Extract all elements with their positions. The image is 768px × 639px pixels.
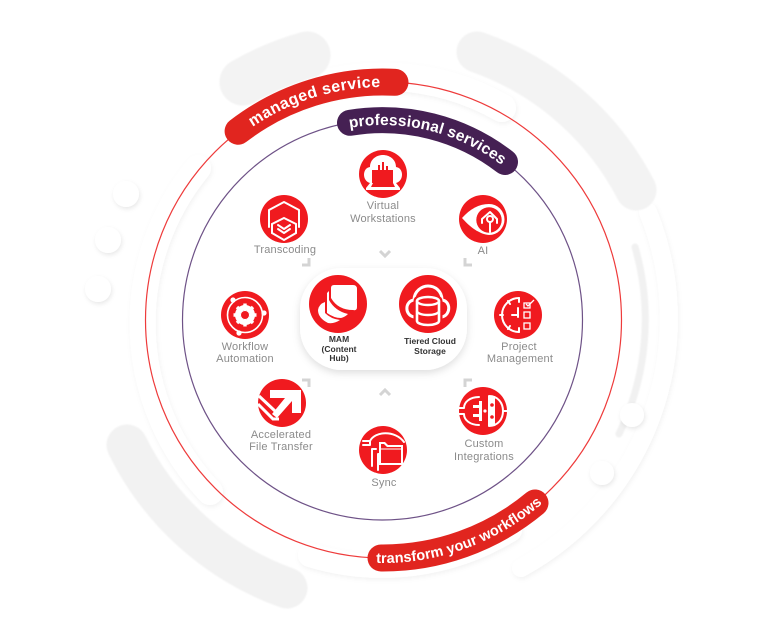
inner purple ring: [182, 120, 582, 520]
item: virtual workstations: Virtual: [367, 200, 399, 212]
icon: arrow and chevrons: [258, 379, 306, 427]
label: tiered cloud storage: Storage: [414, 346, 446, 356]
label: MAM: (Content: [322, 344, 357, 354]
item: accelerated file transfer: File Transfer: [249, 441, 313, 453]
label: tiered cloud storage: Tiered Cloud: [404, 336, 456, 346]
label: MAM: Hub): [329, 353, 349, 363]
icon: folders: [359, 426, 407, 474]
icon: eye: [459, 195, 507, 243]
banner: managed service: managed service: [248, 76, 380, 126]
grey strip: right: [619, 247, 645, 434]
item: tiered cloud storage: [399, 275, 457, 356]
label: MAM: [322, 334, 357, 363]
icon: stacked media: [309, 275, 367, 333]
white band: outer right: [521, 212, 669, 568]
item: workflow automation: Workflow: [222, 341, 268, 353]
centre panel: [300, 268, 467, 370]
item: custom integrations: Custom: [464, 438, 504, 450]
white band: left: [143, 168, 210, 492]
decorative dots: [85, 181, 644, 485]
item: AI: AI: [478, 245, 488, 257]
outer red ring: [146, 82, 622, 558]
banner: transform your workflows: transform your workflows: [376, 499, 541, 563]
item: virtual workstations: [350, 150, 416, 225]
white band: top: [285, 77, 502, 108]
item: project management: Management: [487, 353, 553, 365]
arrows and corner brackets: [302, 251, 472, 395]
item: accelerated file transfer: Accelerated: [251, 429, 311, 441]
background decoration: [127, 52, 669, 588]
grey band: bottom left: [127, 445, 287, 588]
item: project management: Project: [501, 341, 537, 353]
label: tiered cloud storage: [404, 336, 456, 356]
icon: hexagons: [260, 195, 308, 243]
label: MAM: MAM: [329, 334, 349, 344]
icon: clock and checklist: [494, 291, 542, 339]
grey band: top right: [477, 52, 636, 190]
item: sync: [359, 426, 407, 489]
item: custom integrations: Integrations: [454, 451, 514, 463]
grey band: top left: [243, 55, 307, 82]
item: transcoding: Transcoding: [254, 244, 316, 256]
item: workflow automation: [216, 291, 274, 365]
item: custom integrations: [454, 387, 514, 463]
item: accelerated file transfer: [249, 379, 313, 453]
item: AI: [459, 195, 507, 257]
icon: cloud workstation: [359, 150, 407, 198]
icon: cloud database: [399, 275, 457, 333]
item: project management: [487, 291, 553, 365]
banner: professional services: professional services: [349, 114, 505, 164]
icon: gear: [221, 291, 269, 339]
white band: bottom: [310, 530, 510, 566]
item: sync: Sync: [371, 477, 397, 489]
item: transcoding: [254, 195, 316, 256]
item: virtual workstations: Workstations: [350, 213, 416, 225]
icon: plug: [459, 387, 507, 435]
item: MAM content hub: [309, 275, 367, 363]
banner: managed service: [224, 68, 408, 145]
item: workflow automation: Automation: [216, 353, 274, 365]
